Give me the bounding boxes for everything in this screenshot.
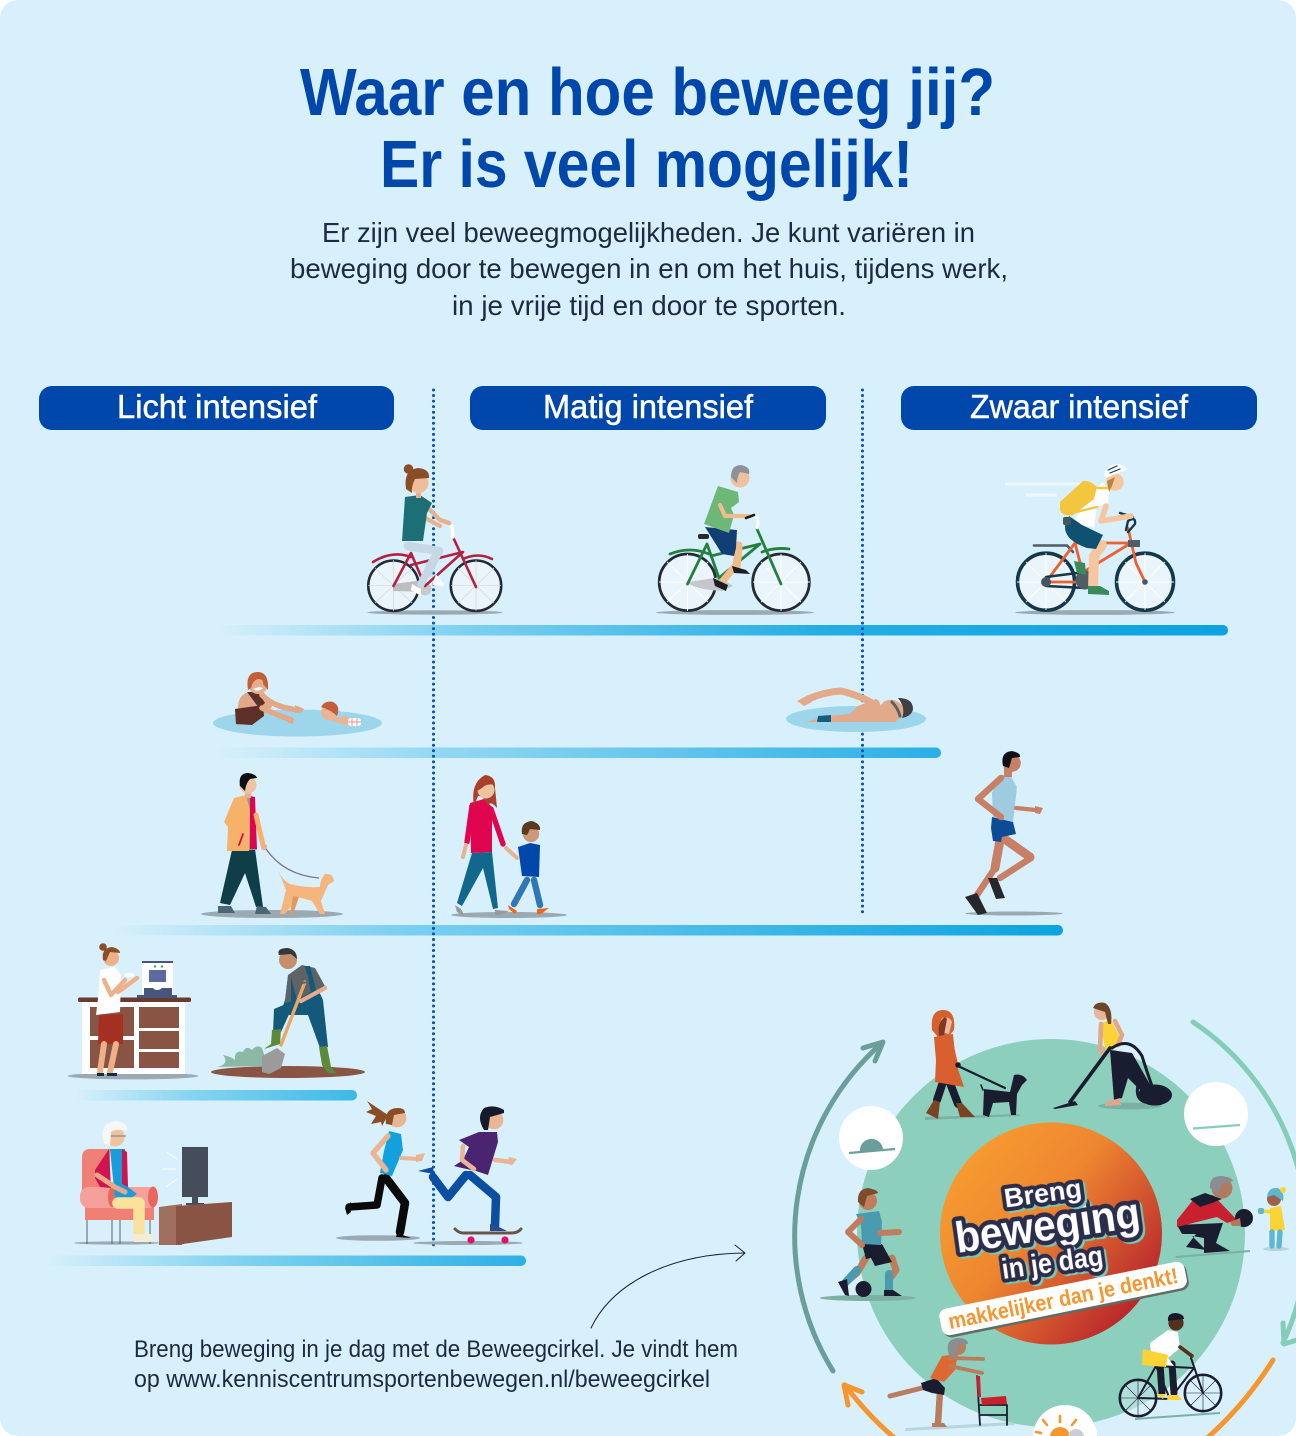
runner: woman with ponytail bbox=[336, 1101, 425, 1241]
intro text bbox=[290, 217, 1008, 321]
intensity bar: huishouden en tuin bbox=[75, 1090, 357, 1100]
heading: licht intensief bbox=[39, 386, 394, 430]
runner: man bbox=[965, 751, 1063, 916]
swimmer: man front crawl bbox=[786, 691, 926, 732]
figure: woman vacuuming bbox=[1053, 1003, 1172, 1109]
figure: man with child and ball bbox=[1175, 1176, 1289, 1258]
grandmother in armchair watching tv bbox=[74, 1121, 232, 1245]
green disc bbox=[857, 1039, 1245, 1427]
heading: zwaar intensief bbox=[901, 386, 1257, 430]
title: Er is veel mogelijk! bbox=[380, 127, 913, 202]
figure: woman balancing at chair bbox=[890, 1338, 1015, 1431]
outer arrow: orange bottom left bbox=[844, 1385, 897, 1436]
intro text: beweging door te bewegen in en om het huis, tijdens werk, bbox=[290, 253, 1008, 284]
icon: horizon circle bbox=[1184, 1082, 1248, 1146]
center sun logo: in je dag bbox=[1000, 1240, 1105, 1286]
title: Waar en hoe beweeg jij? bbox=[300, 55, 995, 130]
cyclist: woman on red bike bbox=[367, 464, 503, 615]
icon: sun circle bbox=[1033, 1405, 1097, 1436]
closing text: op www.kenniscentrumsportenbewegen.nl/beweegcirkel bbox=[134, 1366, 710, 1393]
title bbox=[300, 55, 995, 202]
cyclist: fast rider on orange bike bbox=[1005, 464, 1175, 615]
banner: makkelijker dan je denkt: makkelijker dan je denkt! bbox=[946, 1263, 1180, 1334]
intensity bar: zitten tot skaten bbox=[45, 1256, 526, 1266]
figure: woman walking dog bbox=[925, 1010, 1027, 1120]
panel: beweegcirkel bbox=[795, 1003, 1296, 1436]
cyclist: older man on green bike bbox=[656, 465, 814, 615]
dotted divider: licht / matig bbox=[432, 390, 435, 1250]
gardener with spade bbox=[211, 948, 365, 1078]
outer arrow: orange bottom right bbox=[1205, 1360, 1273, 1436]
heading: matig intensief bbox=[470, 386, 826, 430]
outer arrow: teal left bbox=[795, 1042, 883, 1371]
heading: licht intensief: Licht intensief bbox=[117, 388, 318, 425]
intensity bar: wandelen en hardlopen bbox=[110, 925, 1063, 936]
skater: girl on skateboard bbox=[413, 1106, 523, 1245]
kitchen counter with woman and coffee machine bbox=[68, 943, 198, 1079]
outer arrow: green right bbox=[1193, 1022, 1296, 1344]
figure: child playing football bbox=[820, 1188, 916, 1301]
center sun logo: Breng bbox=[1002, 1173, 1084, 1214]
dotted divider: matig / zwaar bbox=[861, 390, 864, 913]
intensity bar: zwemmen bbox=[215, 748, 941, 758]
figure: cyclist with messenger bag bbox=[1120, 1313, 1221, 1420]
walker: mother and child bbox=[451, 775, 567, 918]
heading: matig intensief: Matig intensief bbox=[543, 388, 754, 425]
closing text: Breng beweging in je dag met de Beweegcirkel. Je vindt hem bbox=[134, 1336, 738, 1363]
swimmers: woman and child in pool bbox=[213, 672, 382, 736]
walker: man with dog bbox=[201, 773, 343, 918]
intensity bar: fietsen bbox=[215, 625, 1228, 636]
closing text bbox=[134, 1336, 738, 1393]
heading: zwaar intensief: Zwaar intensief bbox=[970, 388, 1189, 425]
intro text: Er zijn veel beweegmogelijkheden. Je kunt variëren in bbox=[322, 217, 975, 248]
curved arrow to beweegcirkel bbox=[591, 1245, 745, 1328]
center sun logo bbox=[940, 1122, 1162, 1344]
intro text: in je vrije tijd en door te sporten. bbox=[452, 290, 846, 321]
center sun logo: beweging bbox=[952, 1188, 1143, 1263]
icon: sunrise circle bbox=[839, 1106, 903, 1170]
